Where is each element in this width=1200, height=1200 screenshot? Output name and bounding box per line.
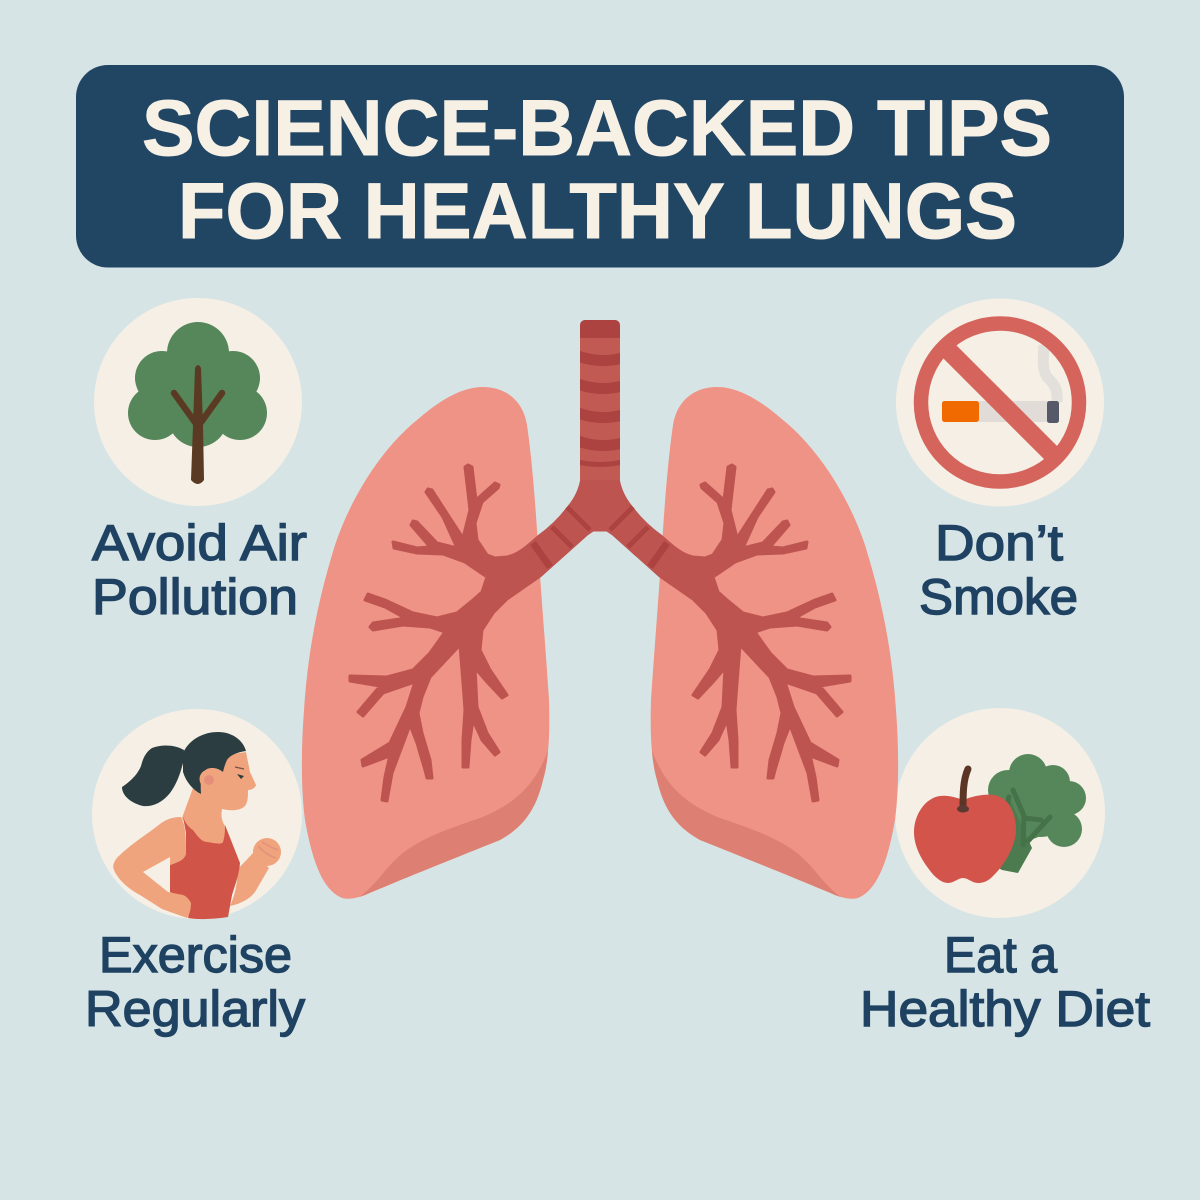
runner arm xyxy=(113,817,191,918)
label: avoid air pollution: Avoid Air xyxy=(92,515,307,571)
title banner xyxy=(76,65,1124,268)
apple xyxy=(914,795,1016,883)
icon: tree in circle xyxy=(94,298,302,506)
label: eat a healthy diet: Eat a xyxy=(944,927,1057,983)
label: avoid air pollution xyxy=(92,515,307,625)
cigarette xyxy=(979,401,1049,422)
bronchial bands xyxy=(533,507,590,567)
label: don't smoke: Smoke xyxy=(919,569,1078,625)
title line 2: FOR HEALTHY LUNGS xyxy=(178,166,1017,255)
runner front arm xyxy=(230,853,269,906)
trachea xyxy=(580,320,620,480)
label: exercise regularly: Regularly xyxy=(85,981,305,1037)
label: avoid air pollution: Pollution xyxy=(92,569,298,625)
runner tank top xyxy=(170,817,240,919)
runner ponytail xyxy=(122,746,184,806)
prohibition sign xyxy=(921,324,1079,482)
runner neck and face xyxy=(182,752,256,848)
runner hair xyxy=(183,732,246,794)
right lung xyxy=(599,387,898,902)
smoke xyxy=(1043,345,1057,402)
icon: apple and broccoli in circle xyxy=(895,708,1105,918)
left lung xyxy=(302,387,601,902)
label: exercise regularly xyxy=(85,927,305,1037)
runner fist xyxy=(253,838,281,866)
label: don't smoke: Don’t xyxy=(935,515,1063,571)
icon: no smoking in circle xyxy=(896,298,1104,506)
bronchial tree xyxy=(350,465,601,801)
label: exercise regularly: Exercise xyxy=(99,927,292,983)
runner eye xyxy=(237,774,244,779)
label: don't smoke xyxy=(919,515,1078,625)
title line 1: SCIENCE-BACKED TIPS xyxy=(142,83,1052,172)
runner ear xyxy=(200,770,218,788)
icon: runner in circle xyxy=(92,709,302,919)
broccoli xyxy=(985,754,1086,873)
apple stem xyxy=(963,769,968,808)
label: eat a healthy diet xyxy=(860,927,1150,1037)
label: eat a healthy diet: Healthy Diet xyxy=(860,981,1150,1037)
